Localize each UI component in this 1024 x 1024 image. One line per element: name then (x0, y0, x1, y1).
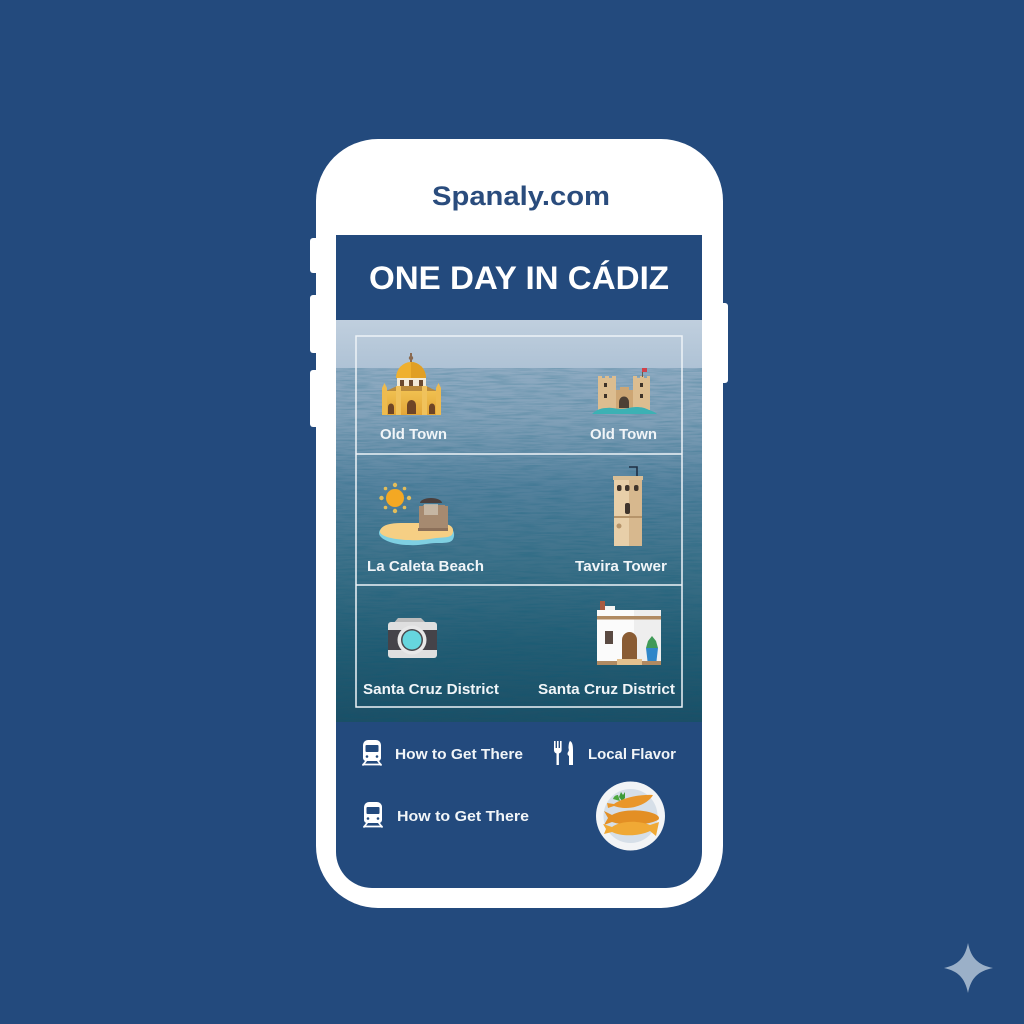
label: Santa Cruz District (363, 682, 499, 698)
icon: castle (592, 368, 657, 414)
icon: cathedral (382, 353, 441, 415)
cell: tavira tower (575, 467, 667, 575)
label: How to Get There (395, 747, 523, 763)
cell: la caleta beach (367, 483, 484, 575)
icon: beach island (379, 483, 454, 545)
phone side buttons (310, 238, 728, 427)
watermark: sparkle (944, 943, 993, 993)
cell: old town cathedral (380, 353, 447, 443)
screen base (336, 722, 702, 888)
cell: santa cruz house (538, 601, 675, 698)
phone screen (336, 320, 702, 888)
label: Old Town (380, 427, 447, 443)
cell: old town castle (590, 368, 657, 443)
icon: white house (597, 601, 661, 665)
link: local flavor (554, 741, 676, 765)
link: how to get there 1 (363, 740, 523, 765)
phone body (316, 139, 723, 908)
label: Old Town (590, 427, 657, 443)
label: How to Get There (397, 809, 529, 825)
site name: Spanaly.com (432, 181, 610, 211)
cell: santa cruz camera (363, 618, 499, 698)
label: Tavira Tower (575, 559, 667, 575)
link: how to get there 2 (364, 802, 529, 827)
sea photo (336, 320, 702, 722)
label: La Caleta Beach (367, 559, 484, 575)
attractions grid (356, 336, 682, 707)
icon: train (363, 740, 381, 765)
footer links (363, 740, 676, 850)
icon: train (364, 802, 382, 827)
title banner (336, 235, 702, 320)
icon: fork and knife (554, 741, 573, 765)
phone mockup (310, 139, 993, 993)
icon: fried fish plate (596, 782, 665, 850)
label: Santa Cruz District (538, 682, 675, 698)
icon: tower (613, 467, 643, 546)
label: Local Flavor (588, 747, 676, 763)
icon: camera (388, 618, 437, 658)
title banner: ONE DAY IN CÁDIZ (369, 260, 669, 296)
